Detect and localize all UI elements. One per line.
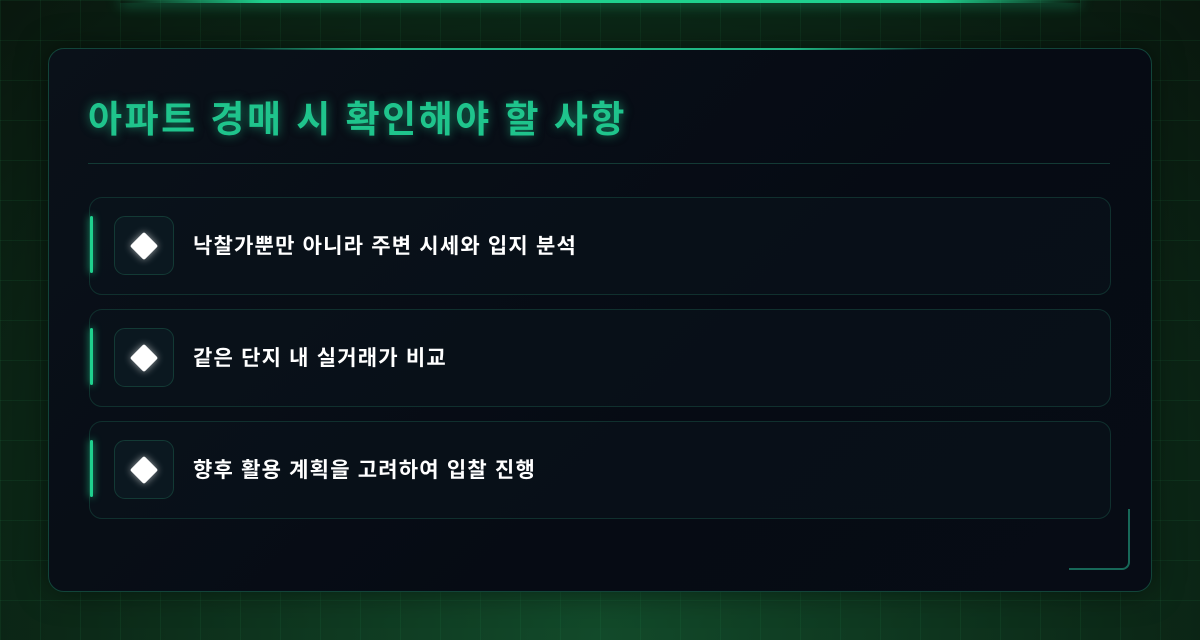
icon: diamond: [114, 216, 174, 275]
text 2: 같은 단지 내 실거래가 비교: [193, 347, 447, 370]
item 3: [89, 421, 1111, 519]
panel: card: [48, 48, 1152, 592]
icon: diamond: [114, 440, 174, 499]
corner bracket: [1069, 509, 1130, 570]
text 1: 낙찰가뿐만 아니라 주변 시세와 입지 분석: [193, 235, 577, 258]
icon: diamond: [114, 328, 174, 387]
item 2: [89, 309, 1111, 407]
text 3: 향후 활용 계획을 고려하여 입찰 진행: [193, 459, 536, 482]
title: 아파트 경매 시 확인해야 할 사항: [88, 99, 627, 140]
item 1: [89, 197, 1111, 295]
